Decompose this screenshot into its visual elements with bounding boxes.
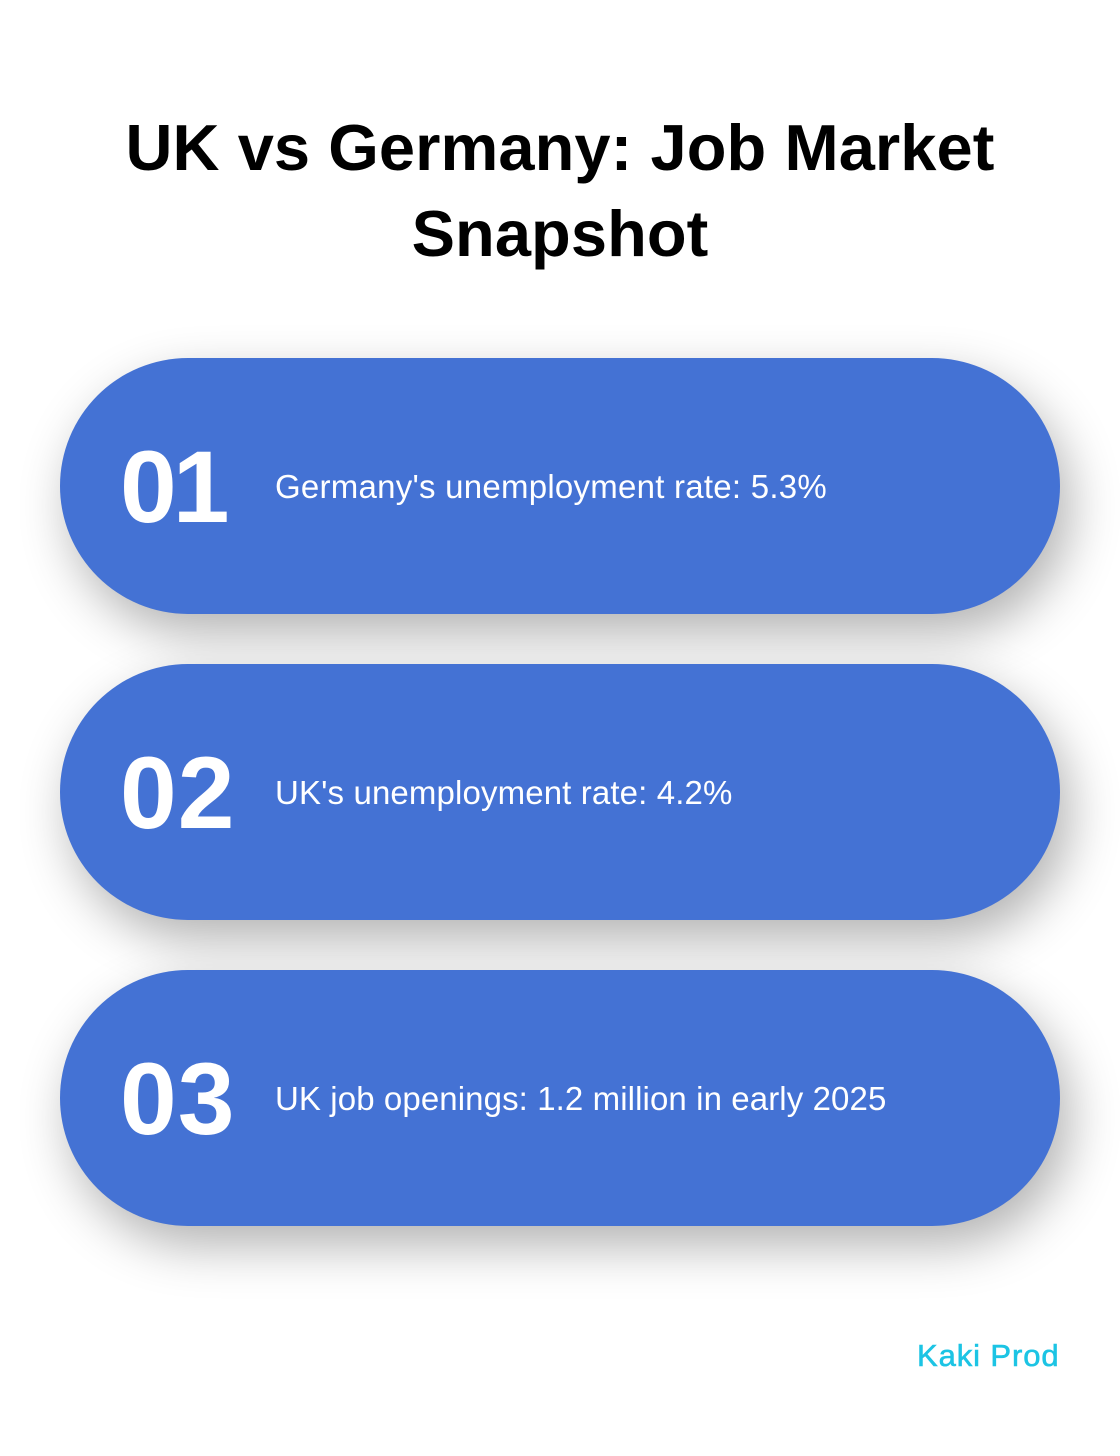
logo: Kaki Prod: Kaki Prod — [917, 1338, 1060, 1373]
text: UK unemployment rate: UK's unemployment rate: 4.2% — [275, 774, 732, 811]
number 02: 02 — [120, 736, 235, 850]
panel: Germany unemployment — [60, 358, 1060, 614]
text: UK job openings: UK job openings: 1.2 million in early 2025 — [275, 1080, 886, 1117]
number 03: 03 — [120, 1042, 235, 1156]
panel: UK unemployment — [60, 664, 1060, 920]
number 01: 01 — [120, 430, 225, 544]
text: Germany unemployment rate: Germany's unemployment rate: 5.3% — [275, 468, 827, 505]
title: Snapshot — [412, 197, 708, 270]
title: UK vs Germany: Job Market — [126, 111, 994, 184]
panel: UK job openings — [60, 970, 1060, 1226]
title — [126, 111, 994, 270]
